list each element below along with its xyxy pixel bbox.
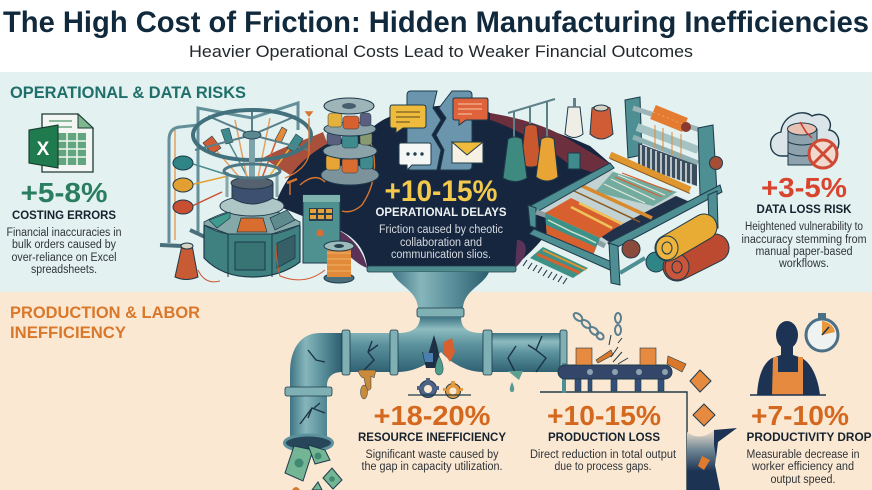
icon: falling boxes — [667, 356, 715, 470]
icon: thread spool — [276, 241, 354, 283]
stat: operational delays: Friction caused by cheotic — [379, 224, 503, 236]
panel: production and labor inefficiency — [0, 272, 872, 490]
stat: resource inefficiency: RESOURCE INEFFICIENCY — [358, 430, 506, 444]
stat: operational delays — [376, 175, 506, 261]
icon: excel spreadsheet: X — [37, 139, 50, 160]
icon: white chat bubble — [399, 143, 431, 170]
stat: costing errors — [6, 177, 122, 276]
icon: falling money — [285, 445, 342, 490]
illustration: circular knitting machine — [160, 103, 311, 277]
stat: costing errors: Financial inaccuracies in — [6, 227, 122, 239]
stat: resource inefficiency: +18-20% — [374, 400, 491, 431]
panel: operational and data risks — [0, 72, 872, 292]
stat: production loss: Direct reduction in total output — [530, 449, 677, 461]
icon: broken communication tablet — [407, 91, 472, 170]
stat: production loss: PRODUCTION LOSS — [548, 430, 660, 444]
stat: productivity drop: PRODUCTIVITY DROP — [746, 430, 872, 444]
stat: productivity drop — [746, 400, 872, 486]
stat: costing errors: spreadsheets. — [31, 264, 97, 276]
stat: data loss risk: +3-5% — [761, 172, 847, 203]
icon: yellow chat bubble — [390, 105, 426, 133]
stat: resource inefficiency: Significant waste caused by — [366, 449, 499, 461]
stat: operational delays: collaboration and — [400, 237, 482, 249]
stat: resource inefficiency — [358, 400, 506, 473]
stat: costing errors: bulk orders caused by — [12, 239, 116, 251]
stat: costing errors: COSTING ERRORS — [12, 208, 116, 222]
illustration: leaking pipe — [284, 272, 567, 451]
stat: productivity drop: output speed. — [770, 474, 836, 486]
icon: yarn cone left — [175, 243, 220, 282]
icon: worker silhouette — [750, 321, 826, 395]
arrows: tangled orange threads — [285, 112, 374, 212]
stat: production loss — [530, 400, 677, 473]
stat: operational delays: +10-15% — [384, 175, 498, 208]
stat: productivity drop: Measurable decrease in — [746, 449, 860, 461]
stat: data loss risk: DATA LOSS RISK — [756, 202, 852, 216]
heading: production and labor inefficiency: PRODUCTION & LABOR — [10, 304, 200, 322]
stat: production loss: due to process gaps. — [554, 461, 652, 473]
icon: control panel — [303, 195, 340, 263]
subtitle: Heavier Operational Costs Lead to Weaker Financial Outcomes — [189, 42, 693, 61]
stat: data loss risk — [742, 172, 866, 270]
stat: costing errors: over-reliance on Excel — [12, 252, 116, 264]
icon: orange chat bubble — [453, 98, 488, 125]
icon: gears — [408, 378, 471, 398]
icon: excel spreadsheet — [29, 114, 93, 172]
stat: resource inefficiency: the gap in capacity utilization. — [362, 461, 502, 473]
stat: data loss risk: inaccuracy stemming from — [742, 234, 866, 246]
stat: operational delays: communication slios. — [391, 249, 491, 261]
icon: spool tower — [321, 98, 379, 185]
icon: fabric rolls — [646, 227, 715, 280]
icon: stopwatch — [806, 313, 838, 351]
icon: broken chain — [572, 311, 621, 341]
stat: costing errors: +5-8% — [20, 177, 108, 208]
icon: leaking drips — [358, 356, 523, 399]
title: The High Cost of Friction: Hidden Manufacturing Inefficiencies — [3, 6, 869, 39]
heading: operational and data risks: OPERATIONAL & DATA RISKS — [10, 84, 246, 102]
icon: yarn cones — [503, 98, 613, 182]
stat: productivity drop: worker efficiency and — [751, 461, 854, 473]
dark central backdrop — [263, 105, 612, 272]
heading: production and labor inefficiency — [10, 304, 200, 342]
stat: data loss risk: workflows. — [778, 258, 829, 270]
stat: operational delays: OPERATIONAL DELAYS — [376, 205, 506, 219]
icon: envelope — [452, 142, 483, 163]
stat: production loss: +10-15% — [547, 400, 661, 431]
stat: productivity drop: +7-10% — [751, 400, 849, 431]
illustration: weaving loom — [523, 97, 722, 285]
illustration: dark cliff — [687, 428, 737, 490]
icon: cloud database failure — [771, 113, 839, 168]
stat: data loss risk: manual paper-based — [756, 246, 852, 258]
heading: production and labor inefficiency: INEFFICIENCY — [10, 324, 126, 342]
icon: broken conveyor belt — [540, 335, 687, 490]
